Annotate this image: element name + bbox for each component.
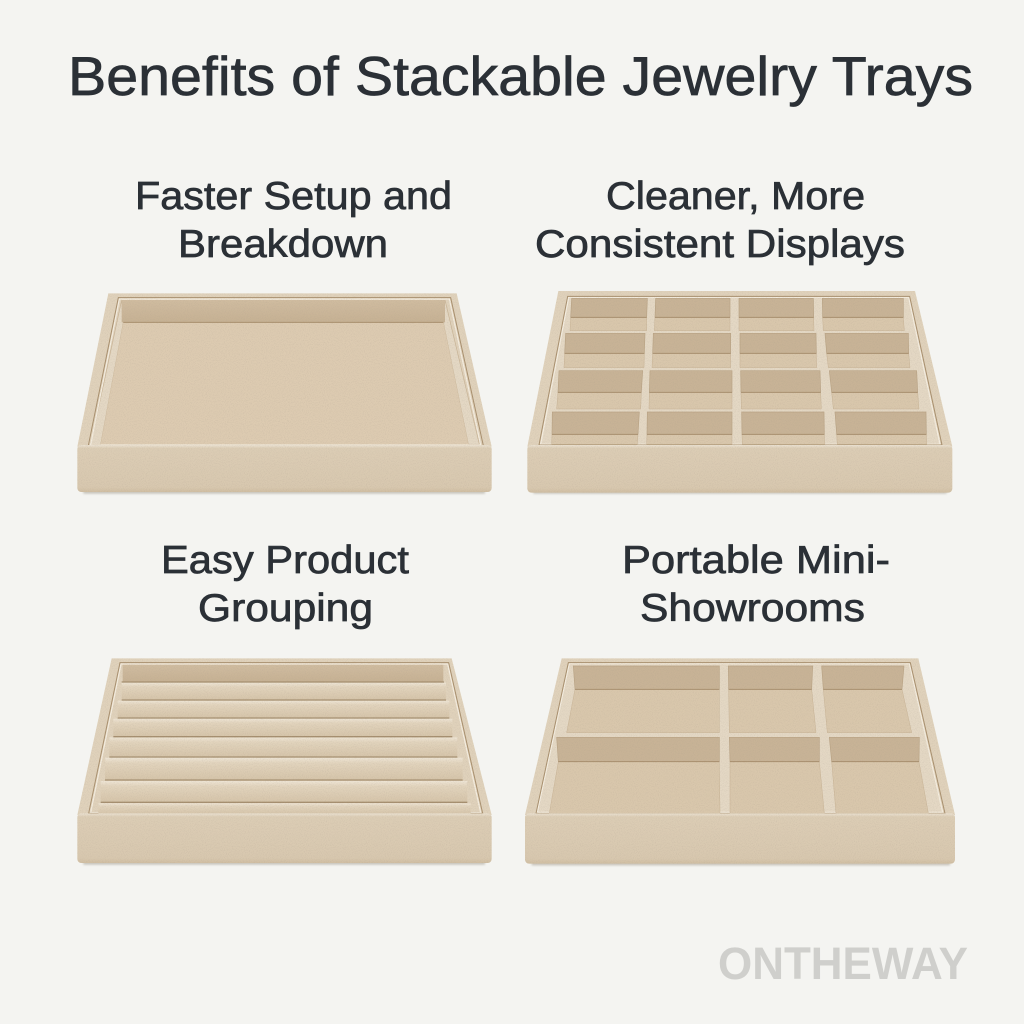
- compartment row 4: [552, 412, 927, 444]
- watermark: ONTHEWAY: [718, 938, 968, 989]
- front panel: [77, 445, 492, 492]
- tray floor: [101, 322, 468, 444]
- heading: portable mini-showrooms: Portable Mini-: [622, 539, 890, 582]
- heading: portable mini-showrooms: Showrooms: [640, 587, 865, 630]
- heading: easy product grouping: [161, 539, 409, 630]
- compartment row 2: [564, 333, 910, 368]
- heading: faster setup and breakdown: Breakdown: [178, 223, 388, 266]
- back wall: [122, 300, 445, 322]
- tray: ring rolls: [77, 658, 492, 865]
- ring roll 4: [109, 737, 457, 756]
- tray: sixteen compartment grid: [527, 291, 952, 494]
- ring roll 1: [122, 683, 446, 699]
- heading: cleaner, more consistent displays: Cleaner, More: [606, 175, 865, 218]
- ring roll 5: [105, 758, 463, 779]
- tray: open flat tray: [77, 293, 492, 494]
- compartment row 1: [567, 666, 912, 733]
- heading: easy product grouping: Grouping: [198, 587, 373, 630]
- ring roll 2: [118, 701, 449, 717]
- heading: cleaner, more consistent displays: Consistent Displays: [535, 223, 905, 266]
- front panel: [525, 813, 955, 864]
- ring roll 7: [98, 803, 471, 814]
- back wall: [123, 665, 443, 682]
- compartment row 2: [549, 737, 928, 813]
- heading: cleaner, more consistent displays: [535, 175, 905, 266]
- heading: portable mini-showrooms: [622, 539, 890, 630]
- front panel: [527, 445, 952, 493]
- heading: easy product grouping: Easy Product: [161, 539, 409, 582]
- tray: six compartments: [525, 658, 955, 865]
- heading: faster setup and breakdown: Faster Setup and: [135, 175, 452, 218]
- compartment row 3: [557, 371, 919, 409]
- front panel: [77, 813, 492, 863]
- compartment row 1: [570, 298, 904, 331]
- title: Benefits of Stackable Jewelry Trays: [68, 45, 973, 107]
- heading: faster setup and breakdown: [135, 175, 452, 266]
- ring roll 6: [101, 781, 467, 802]
- ring roll 3: [113, 719, 452, 736]
